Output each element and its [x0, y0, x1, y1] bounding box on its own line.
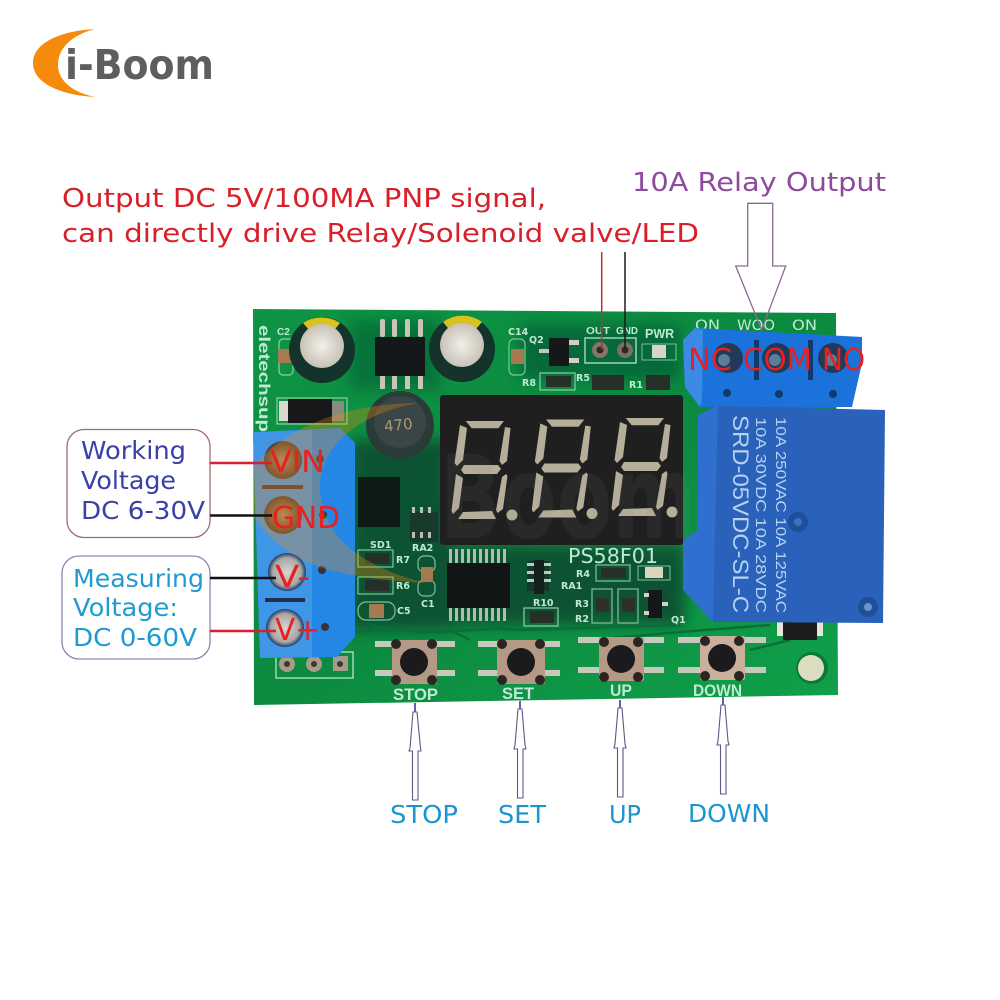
diode — [277, 398, 347, 424]
silkscreen: relay contacts — [695, 318, 817, 334]
top SMD parts: R5 — [576, 373, 590, 384]
capacitor C2 — [277, 317, 355, 383]
relay terminal block — [683, 328, 862, 407]
arrow: DOWN — [717, 697, 729, 794]
logo wordmark: i-Boom — [65, 41, 214, 89]
top SMD parts: R8 — [522, 378, 536, 389]
terminal labels: red: NO — [822, 343, 865, 378]
microcontroller — [447, 549, 510, 621]
measuring voltage text: Voltage: — [73, 593, 178, 622]
watermark: i-Boom logo over board — [245, 403, 696, 583]
component under relay — [777, 622, 823, 640]
button: UP — [578, 637, 664, 700]
relay markings: 10A 30VDC 10A 28VDC — [752, 417, 769, 613]
PWR LED — [642, 327, 676, 360]
top SMD parts — [508, 327, 670, 391]
button captions: SET — [498, 800, 547, 829]
panel: circuit board — [245, 309, 885, 705]
button: SET: SET — [502, 684, 535, 703]
left SMD parts: C5 — [397, 606, 411, 617]
watermark: i-Boom logo over board: Boom — [440, 431, 696, 566]
terminal labels: red: VIN — [270, 445, 325, 480]
resistor array RA1 and R10: R10 — [533, 598, 554, 609]
left SMD parts: R6 — [396, 581, 410, 592]
OUT / GND header pads — [585, 326, 638, 363]
button: UP: UP — [610, 681, 632, 700]
bottom connector pads — [276, 652, 353, 678]
top SMD parts: C14 — [508, 327, 529, 338]
callout: PNP output signal — [62, 184, 699, 249]
callout: relay output heading: 10A Relay Output — [632, 168, 886, 198]
button: DOWN: DOWN — [693, 681, 742, 700]
working voltage text: DC 6-30V — [81, 496, 205, 525]
display body — [440, 395, 683, 545]
working voltage text — [81, 436, 205, 525]
left SMD parts: C1 — [421, 599, 435, 610]
button captions: DOWN — [688, 799, 770, 828]
terminal labels: red: V- — [275, 560, 310, 595]
small sot chip — [410, 507, 438, 542]
lower right SMD parts — [575, 565, 686, 626]
terminal labels: red: COM — [743, 343, 812, 378]
button: STOP: STOP — [393, 685, 438, 704]
left SMD parts: SD1 — [370, 540, 391, 551]
model label PS58F01: PS58F01 — [568, 544, 658, 568]
measuring voltage text: DC 0-60V — [73, 623, 197, 652]
lower right SMD parts: R3 — [575, 599, 589, 610]
top SMD parts: R1 — [629, 380, 643, 391]
leader lines: V- and V+ — [210, 578, 276, 631]
button: DOWN — [678, 636, 766, 700]
leader lines: OUT and GND — [602, 252, 625, 349]
left SMD parts: R7 — [396, 555, 410, 566]
arrow: relay output — [736, 203, 786, 330]
lower right SMD parts: R2 — [575, 614, 589, 625]
digit 3 — [612, 418, 678, 518]
digit 1 — [452, 421, 518, 520]
relay — [683, 406, 885, 623]
PWR LED: PWR — [645, 327, 674, 341]
panel: measuring voltage — [62, 556, 210, 659]
input terminal block — [253, 428, 355, 658]
board substrate — [253, 309, 838, 705]
dark copper region — [350, 320, 685, 630]
button: SET — [478, 639, 560, 703]
OUT / GND header pads: GND — [616, 326, 638, 337]
silkscreen: relay contacts: WOO — [737, 318, 775, 334]
silkscreen: relay contacts: ON — [792, 318, 817, 334]
terminal labels: red — [270, 343, 865, 648]
seven segment display — [440, 395, 683, 545]
mounting hole — [796, 652, 828, 684]
left SMD parts — [358, 540, 435, 620]
button: STOP — [375, 639, 455, 704]
silkscreen: relay contacts: ON — [695, 318, 720, 334]
digit 2 — [532, 420, 598, 519]
terminal labels: red: V+ — [275, 613, 320, 648]
relay markings — [728, 415, 789, 613]
capacitor output — [429, 316, 495, 382]
board traces — [280, 625, 790, 650]
MOSFET — [358, 477, 400, 527]
terminal labels: red: GND — [272, 501, 340, 536]
terminal labels: red: NC — [688, 343, 732, 378]
resistor array RA1 and R10 — [524, 560, 590, 626]
button captions — [390, 799, 770, 829]
top SMD parts: Q2 — [529, 335, 544, 346]
relay markings: 10A 250VAC 10A 125VAC — [772, 417, 789, 613]
measuring voltage text — [73, 564, 204, 652]
arrow: SET — [514, 701, 526, 798]
logo: i-Boom — [33, 29, 214, 97]
left SMD parts: RA2 — [412, 543, 433, 554]
regulator chip — [375, 319, 425, 389]
terminal screws — [264, 441, 302, 479]
working voltage text: Working — [81, 436, 186, 465]
panel: working voltage — [67, 430, 210, 538]
relay markings: SRD-05VDC-SL-C — [728, 415, 753, 613]
inductor: 470 — [383, 415, 414, 436]
working voltage text: Voltage — [81, 466, 176, 495]
silkscreen: eletechsup: eletechsup — [255, 325, 272, 432]
arrow: STOP — [409, 703, 421, 800]
capacitor C2: C2 — [277, 327, 290, 338]
OUT / GND header pads: OUT — [586, 326, 610, 337]
icon: orange crescent — [33, 29, 95, 97]
callout: PNP output signal: Output DC 5V/100MA PNP signal, — [62, 184, 546, 214]
leader lines: VIN and GND — [210, 463, 272, 516]
lower right SMD parts: Q1 — [671, 615, 686, 626]
arrow: UP — [614, 700, 626, 797]
resistor array RA1 and R10: RA1 — [561, 581, 582, 592]
button captions: UP — [609, 800, 641, 829]
measuring voltage text: Measuring — [73, 564, 204, 593]
button captions: STOP — [390, 800, 458, 829]
inductor — [366, 391, 434, 459]
resistor array RA1 and R10: R4 — [576, 569, 590, 580]
callout: PNP output signal: can directly drive Relay/Solenoid valve/LED — [62, 219, 699, 249]
